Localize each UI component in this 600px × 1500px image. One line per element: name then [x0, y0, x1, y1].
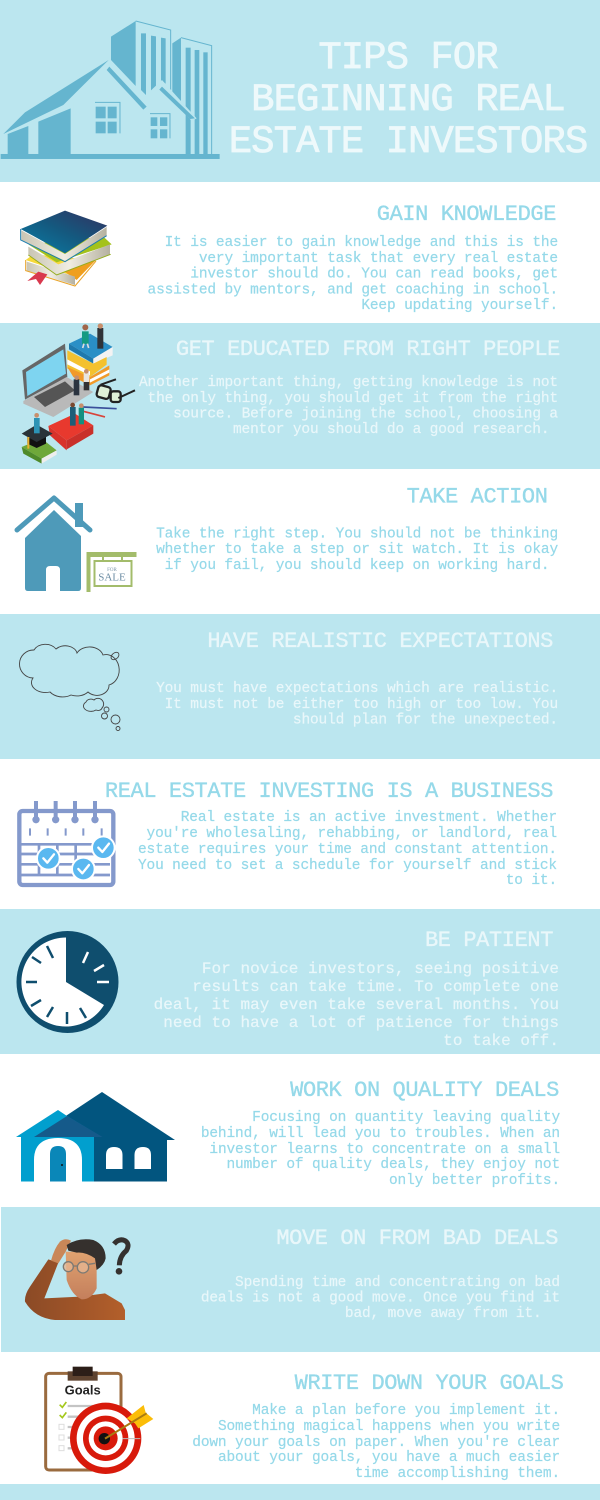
- text block: deal, it may even take several months. You: [154, 996, 559, 1014]
- panel: header: [0, 0, 600, 182]
- title: ESTATE INVESTORS: [229, 120, 587, 164]
- text block: down your goals on paper. When you're clear: [192, 1435, 560, 1451]
- panel: gain knowledge: [0, 182, 600, 323]
- text block: It is easier to gain knowledge and this is the: [165, 235, 558, 251]
- heading: GET EDUCATED FROM RIGHT PEOPLE: [176, 337, 560, 362]
- text block: assisted by mentors, and get coaching in school.: [148, 282, 558, 298]
- text block: estate requires your time and constant attention.: [138, 842, 557, 858]
- text block: you're wholesaling, rehabbing, or landlord, real: [147, 826, 557, 842]
- text block: results can take time. To complete one: [192, 978, 559, 996]
- panel: realistic expectations: [0, 614, 600, 759]
- panel: quality deals: [0, 1054, 600, 1206]
- text block: whether to take a step or sit watch. It is okay: [156, 542, 558, 558]
- panel: bad deals: [1, 1207, 600, 1352]
- panel: business: [0, 759, 600, 909]
- heading: GAIN KNOWLEDGE: [377, 202, 556, 227]
- text block: For novice investors, seeing positive: [202, 960, 559, 978]
- text block: source. Before joining the school, choosing a: [173, 406, 558, 422]
- panel: take action: [0, 469, 600, 614]
- text block: It must not be either too high or too low. You: [165, 697, 558, 713]
- text block: You must have expectations which are realistic.: [156, 681, 558, 697]
- icon: house for sale: SALE: [98, 572, 126, 584]
- heading: TAKE ACTION: [407, 484, 548, 510]
- text block: [148, 235, 558, 314]
- heading: MOVE ON FROM BAD DEALS: [276, 1226, 558, 1251]
- text block: [154, 960, 559, 1050]
- text block: very important task that every real estate: [199, 251, 558, 267]
- text block: [156, 526, 558, 574]
- icon: stack of books: [21, 211, 112, 286]
- heading: HAVE REALISTIC EXPECTATIONS: [207, 629, 553, 654]
- text block: Something magical happens when you write: [218, 1419, 560, 1435]
- icon: goals clipboard with target: [46, 1367, 153, 1474]
- text block: [139, 375, 558, 438]
- icon: goals clipboard with target: Goals: [65, 1382, 101, 1397]
- text block: investor learns to concentrate on a small: [209, 1142, 560, 1158]
- heading: BE PATIENT: [425, 928, 553, 953]
- heading: WORK ON QUALITY DEALS: [290, 1078, 559, 1103]
- text block: [201, 1275, 560, 1322]
- text block: Real estate is an active investment. Whether: [181, 810, 557, 826]
- panel: get educated: [0, 323, 600, 469]
- title: [229, 36, 587, 164]
- text block: Spending time and concentrating on bad: [235, 1275, 560, 1291]
- text block: the only thing, you should get it from the right: [148, 391, 558, 407]
- icon: house for sale: [17, 498, 136, 592]
- text block: bad, move away from it.: [345, 1306, 542, 1322]
- icon: clock: [16, 931, 118, 1033]
- text block: Keep updating yourself.: [361, 298, 558, 314]
- title: TIPS FOR: [318, 36, 498, 80]
- text block: [138, 810, 557, 889]
- text block: need to have a lot of patience for things: [163, 1014, 559, 1032]
- panel: write goals: [0, 1352, 600, 1484]
- title: BEGINNING REAL: [251, 78, 565, 122]
- icon: thinking man: [25, 1239, 128, 1320]
- text block: investor should do. You can read books, get: [190, 266, 558, 282]
- heading: WRITE DOWN YOUR GOALS: [295, 1371, 564, 1396]
- icon: blue houses: [16, 1092, 175, 1182]
- text block: only better profits.: [389, 1173, 560, 1189]
- text block: time accomplishing them.: [355, 1466, 560, 1482]
- text block: number of quality deals, they enjoy not: [226, 1157, 560, 1173]
- text block: Focusing on quantity leaving quality: [252, 1110, 560, 1126]
- text block: [192, 1403, 560, 1482]
- text block: deals is not a good move. Once you find it: [201, 1290, 560, 1306]
- text block: to take off.: [443, 1032, 559, 1050]
- text block: Make a plan before you implement it.: [252, 1403, 560, 1419]
- text block: You need to set a schedule for yourself and stick: [138, 858, 557, 874]
- icon: laptop and books: [22, 323, 135, 464]
- text block: Take the right step. You should not be thinking: [156, 526, 558, 542]
- icon: house and towers: [1, 21, 220, 159]
- text block: to it.: [506, 873, 557, 889]
- text block: [156, 681, 558, 728]
- footer band: [0, 1484, 600, 1500]
- text block: behind, will lead you to troubles. When an: [201, 1126, 560, 1142]
- panel: be patient: [0, 909, 600, 1054]
- icon: thought bubble: [19, 644, 120, 730]
- text block: [201, 1110, 560, 1189]
- text block: about your goals, you have a much easier: [218, 1450, 560, 1466]
- text block: mentor you should do a good research.: [233, 422, 549, 438]
- text block: if you fail, you should keep on working hard.: [165, 558, 549, 574]
- icon: calendar: [19, 801, 115, 885]
- heading: REAL ESTATE INVESTING IS A BUSINESS: [105, 779, 553, 804]
- text block: should plan for the unexpected.: [293, 712, 558, 728]
- icon: house for sale: FOR: [107, 568, 118, 573]
- text block: Another important thing, getting knowledge is not: [139, 375, 558, 391]
